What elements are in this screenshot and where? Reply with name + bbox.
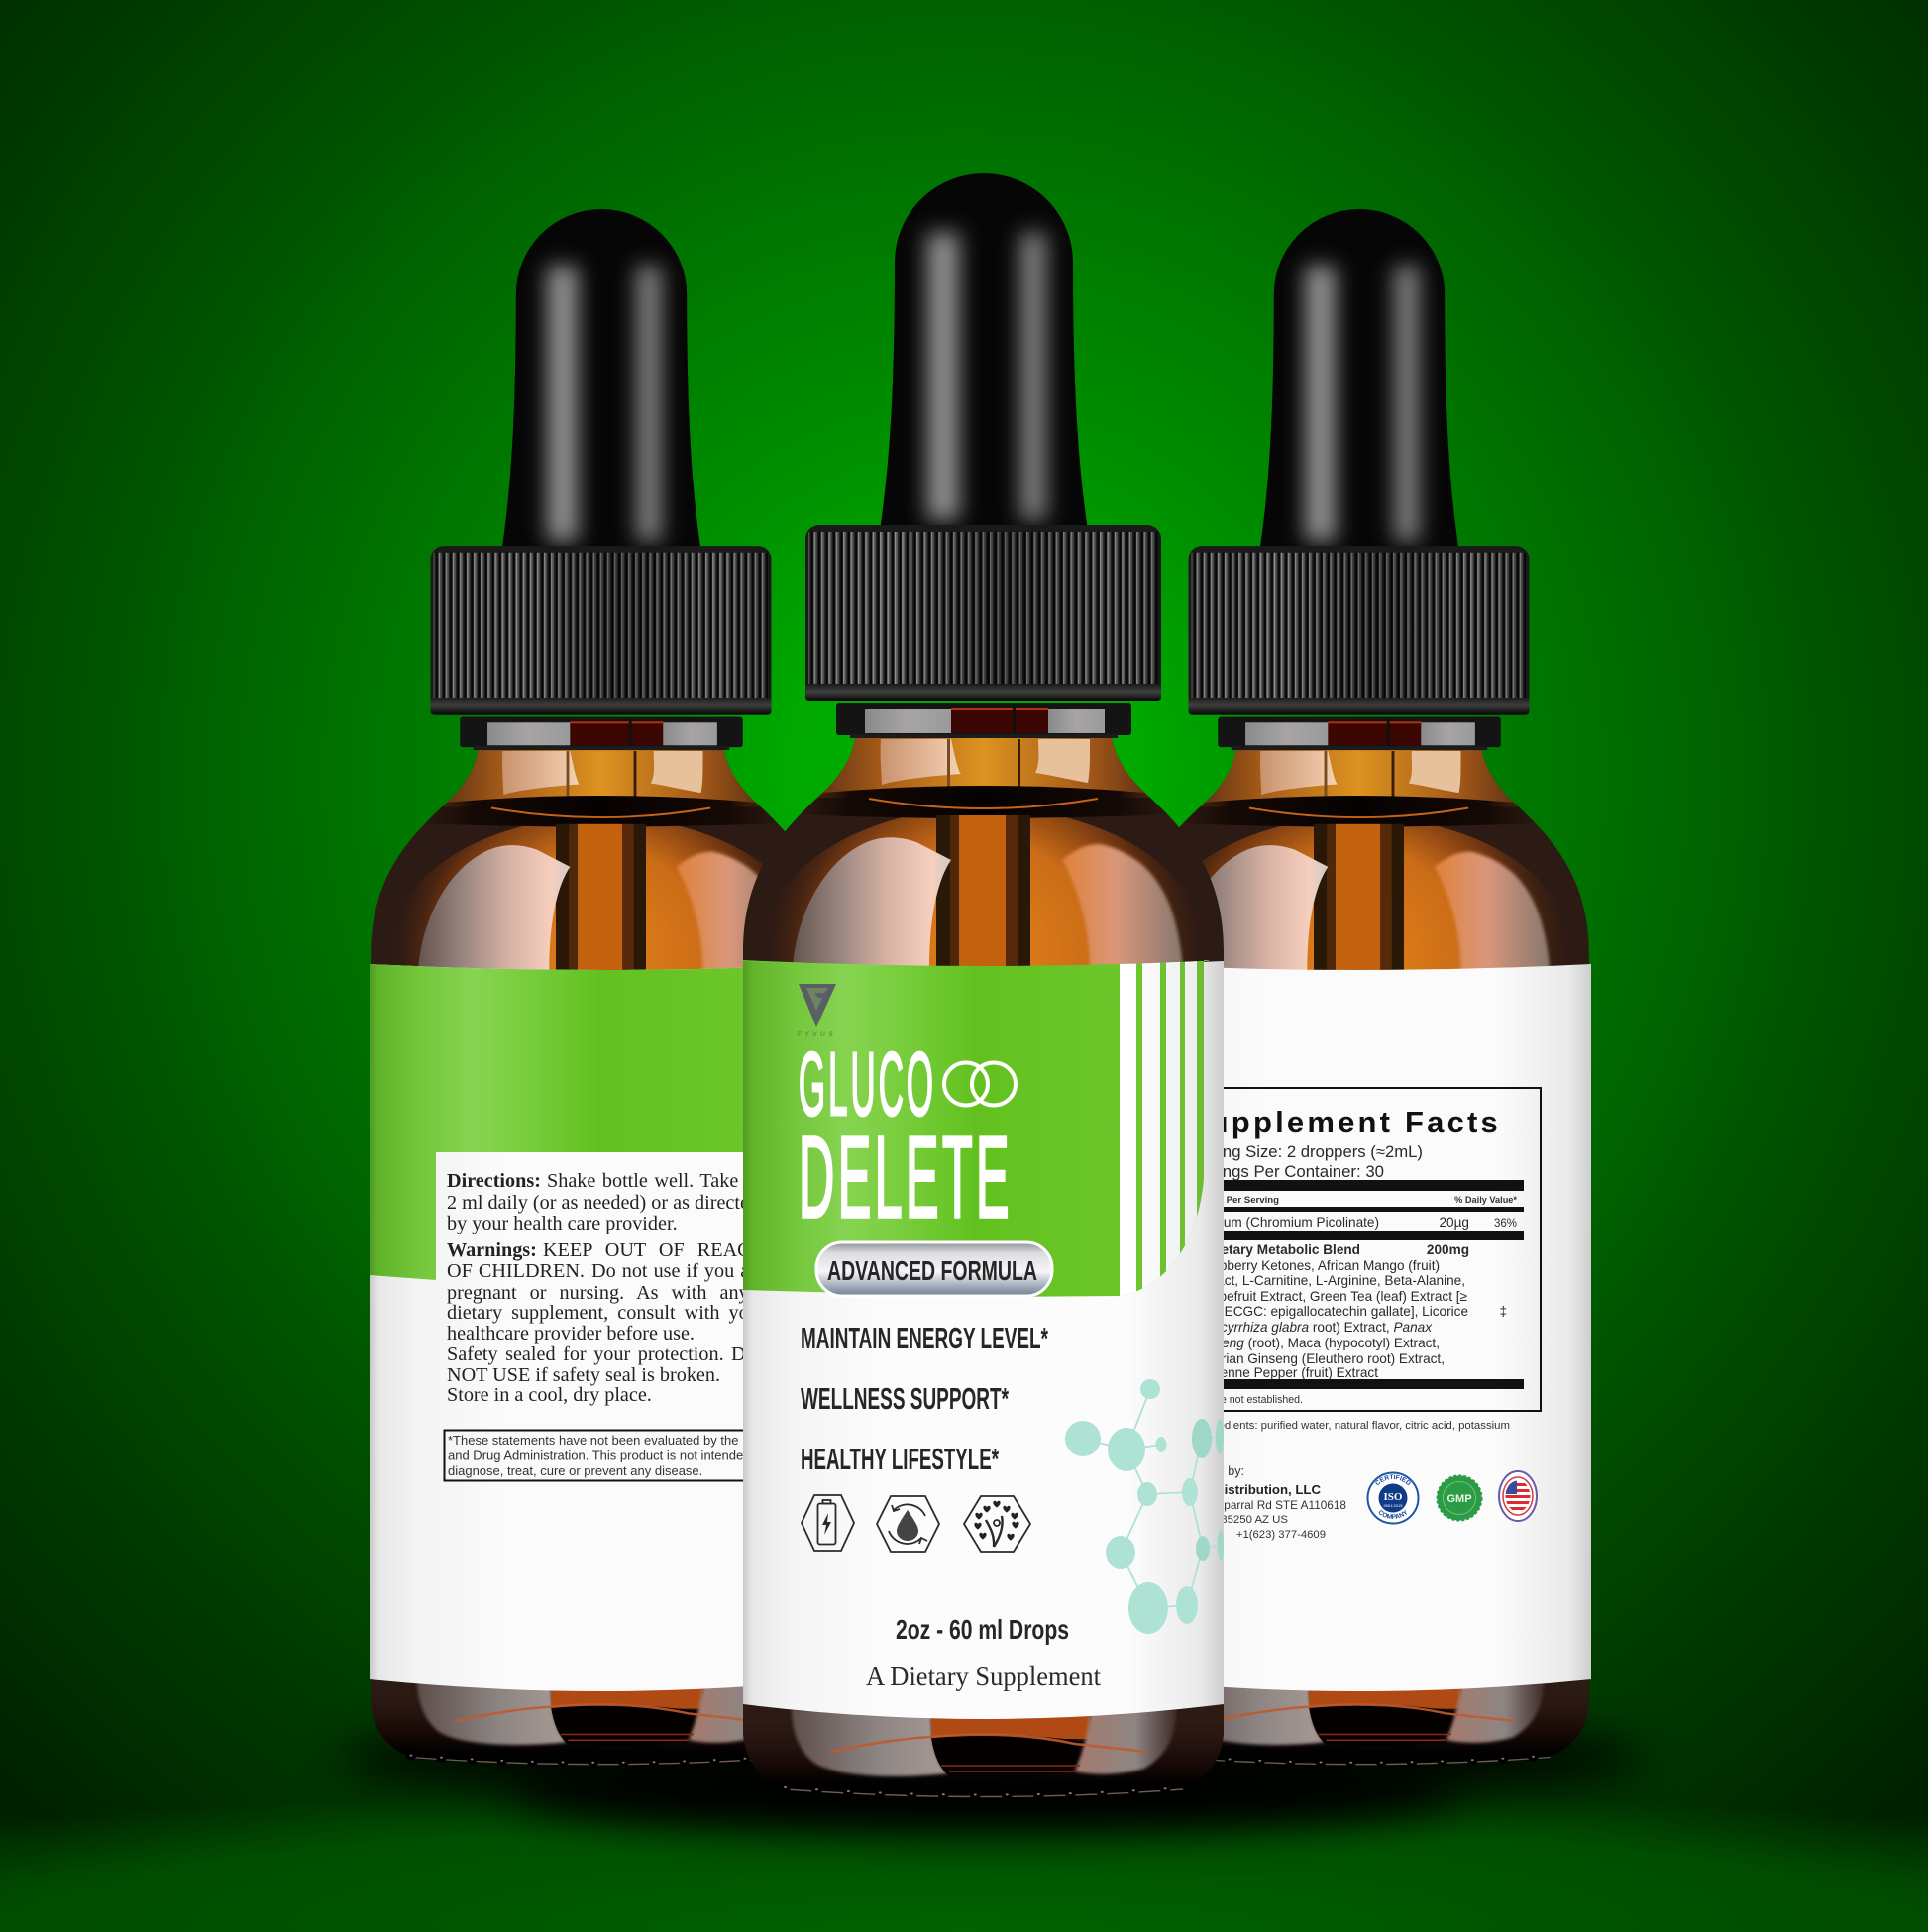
label edge shading xyxy=(743,961,1224,1719)
supplement facts panel: ‡ xyxy=(1499,1304,1507,1319)
disclaimer box: *These statements have not been evaluated by the Food xyxy=(448,1433,772,1448)
directions and warnings text: pregnant or nursing. As with any xyxy=(447,1282,750,1304)
badge: ISO certified: COMPANY xyxy=(1379,1510,1407,1519)
benefit: energy: MAINTAIN ENERGY LEVEL* xyxy=(801,1321,1049,1355)
directions and warnings text: by your health care provider. xyxy=(447,1213,678,1234)
supplement facts panel: (Glycyrrhiza glabra root) Extract, Panax xyxy=(1196,1320,1433,1335)
supplement facts panel: Serving Size: 2 droppers (≈2mL) xyxy=(1185,1142,1423,1161)
badge: ISO certified: CERTIFIED xyxy=(1375,1474,1411,1485)
disclaimer box: and Drug Administration. This product is not intended to xyxy=(448,1449,765,1462)
supplement facts panel: Ginseng (root), Maca (hypocotyl) Extract, xyxy=(1194,1336,1440,1350)
supplement facts panel: Amount Per Serving xyxy=(1188,1195,1279,1206)
label base xyxy=(743,961,1224,1719)
badge: ISO certified: 9001:2015 xyxy=(1384,1503,1403,1508)
bottle: front label, centre xyxy=(738,173,1229,1800)
distributor block: Scottsdale 85250 AZ US xyxy=(1165,1514,1288,1526)
label green block with stripes xyxy=(743,951,1209,1298)
brand logo: FYVUS xyxy=(798,1031,836,1038)
dietary supplement line: A Dietary Supplement xyxy=(866,1662,1101,1691)
disclaimer box: diagnose, treat, cure or prevent any disease. xyxy=(448,1463,702,1478)
floor glow xyxy=(0,1734,1928,1932)
supplement facts panel: Extract, L-Carnitine, L-Arginine, Beta-Alanine, xyxy=(1193,1273,1465,1288)
supplement facts panel: Servings Per Container: 30 xyxy=(1185,1162,1384,1181)
directions and warnings text: Do not use if you are xyxy=(591,1260,765,1282)
label edge shading xyxy=(1127,964,1591,1691)
directions and warnings text: Store in a cool, dry place. xyxy=(447,1384,652,1406)
supplement facts panel: 20µg xyxy=(1439,1215,1469,1230)
product name: GLUCO with rings xyxy=(799,1035,1016,1134)
directions and warnings text: Directions: xyxy=(447,1170,541,1192)
directions and warnings text: Shake bottle well. Take xyxy=(547,1170,738,1192)
distributor block: Fyvus Distribution, LLC xyxy=(1173,1482,1321,1497)
benefit: lifestyle: HEALTHY LIFESTYLE* xyxy=(801,1442,1000,1476)
supplement facts panel: ‡ Daily Value not established. xyxy=(1165,1394,1303,1406)
supplement facts panel: Grapefruit Extract, Green Tea (leaf) Extract [≥ xyxy=(1197,1289,1468,1304)
distributor block: +1(623) 377-4609 xyxy=(1236,1529,1326,1541)
supplement facts panel: Proprietary Metabolic Blend xyxy=(1181,1242,1360,1257)
benefit: wellness: WELLNESS SUPPORT* xyxy=(801,1381,1010,1416)
product name: GLUCO with rings: GLUCO xyxy=(799,1035,936,1134)
directions and warnings text: 2 ml daily (or as needed) or as directed xyxy=(447,1192,759,1214)
supplement facts panel: Supplement Facts xyxy=(1186,1105,1501,1139)
supplement facts panel: Chromium (Chromium Picolinate) xyxy=(1180,1215,1379,1230)
supplement facts panel: Siberian Ginseng (Eleuthero root) Extract, xyxy=(1195,1351,1445,1366)
ground shadow xyxy=(337,1709,1645,1833)
badge: ISO certified xyxy=(1367,1472,1419,1524)
bottle: supplement facts label, right xyxy=(1084,209,1591,1793)
badge: USA flag xyxy=(1499,1471,1537,1521)
icon: drop cycle hexagon xyxy=(877,1496,939,1552)
label edge shading xyxy=(370,964,833,1691)
directions and warnings text: Do xyxy=(731,1343,756,1365)
directions and warnings text xyxy=(447,1170,766,1406)
other ingredients: Other Ingredients: purified water, natural flavor, citric acid, potassium xyxy=(1167,1420,1510,1432)
directions and warnings text: KEEP OUT OF REACH xyxy=(543,1239,765,1261)
supplement facts panel: 200mg xyxy=(1427,1242,1469,1257)
directions and warnings text: Safety sealed for your protection. xyxy=(447,1343,724,1365)
label green band xyxy=(370,964,833,1280)
directions and warnings text: Warnings: xyxy=(447,1239,537,1261)
advanced formula pill: ADVANCED FORMULA xyxy=(827,1255,1037,1286)
supplement facts panel: 36% xyxy=(1494,1218,1517,1230)
badge: GMP xyxy=(1437,1476,1482,1520)
label base xyxy=(370,964,833,1691)
badge: ISO certified: ISO xyxy=(1384,1491,1403,1503)
supplement facts panel: Raspberry Ketones, African Mango (fruit) xyxy=(1196,1258,1440,1273)
directions and warnings text: healthcare provider before use. xyxy=(447,1323,695,1344)
icon: wellness figure hexagon xyxy=(964,1496,1030,1552)
distributor block: Distributed by: xyxy=(1165,1464,1244,1478)
bottle: back label, left xyxy=(366,209,836,1768)
bottle: front label, centre: DELETE xyxy=(799,1113,1013,1241)
disclaimer box xyxy=(444,1431,781,1480)
molecule graphic xyxy=(1065,1379,1224,1634)
badge: GMP: GMP xyxy=(1446,1493,1472,1505)
directions and warnings text: dietary supplement, consult with your xyxy=(447,1302,766,1324)
brand logo xyxy=(798,984,836,1038)
icon: battery hexagon xyxy=(802,1495,854,1551)
size statement: 2oz - 60 ml Drops xyxy=(896,1614,1069,1645)
directions and warnings text: OF CHILDREN. xyxy=(447,1260,585,1282)
advanced formula pill xyxy=(816,1242,1052,1296)
supplement facts panel: 50% ECGC: epigallocatechin gallate], Licorice xyxy=(1194,1304,1468,1319)
distributor block xyxy=(1165,1464,1346,1541)
supplement facts panel: % Daily Value* xyxy=(1454,1195,1517,1205)
supplement facts panel: Cayenne Pepper (fruit) Extract xyxy=(1196,1365,1378,1380)
label base xyxy=(1127,964,1591,1691)
distributor block: 7000 Chaparral Rd STE A110618 xyxy=(1173,1498,1346,1512)
supplement facts panel xyxy=(1165,1088,1541,1411)
directions and warnings text: NOT USE if safety seal is broken. xyxy=(447,1364,720,1386)
